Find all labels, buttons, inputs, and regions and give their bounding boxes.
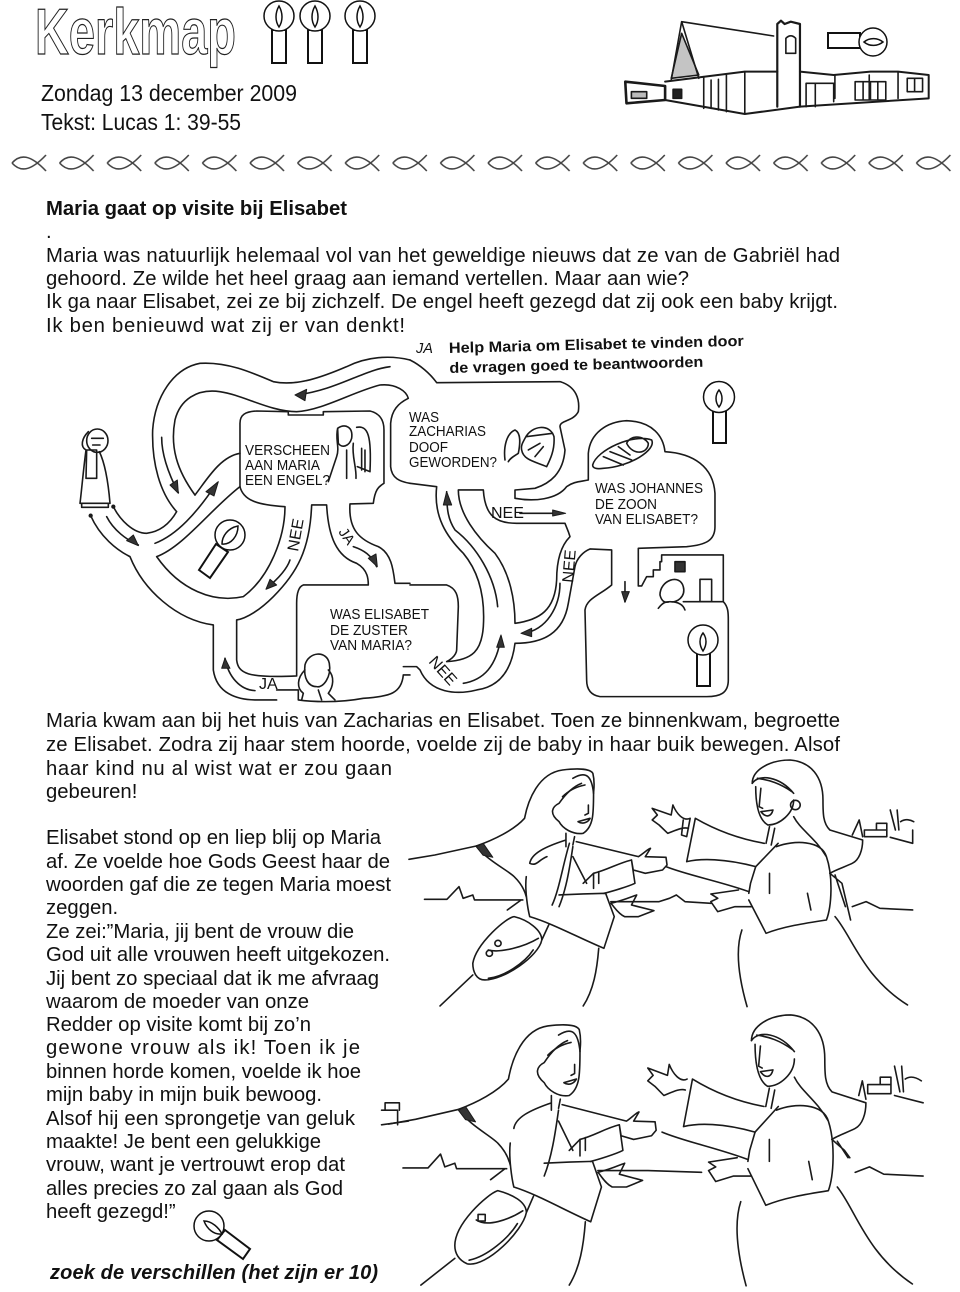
maze walls: left half xyxy=(89,357,410,702)
arrow: nee from Johannes xyxy=(521,583,560,637)
maze arrows xyxy=(107,367,629,691)
story text: Elisabet speaks: waarom de moeder van onze xyxy=(45,991,309,1013)
maze path labels: JA xyxy=(415,341,433,357)
story text: Elisabet speaks: Elisabet stond op en liep blij op Maria xyxy=(46,827,382,849)
story text: arrival: gebeuren! xyxy=(46,781,137,803)
caption: find the differences: zoek de verschillen (het zijn er 10) xyxy=(49,1262,378,1284)
icon: horizontal candle xyxy=(828,28,887,56)
maze question: Elisabet: VAN MARIA? xyxy=(330,638,412,654)
icon: candle top right xyxy=(704,382,734,443)
story text: Elisabet speaks: Alsof hij een sprongetje van geluk xyxy=(46,1108,356,1130)
arrow: up to Zacharias xyxy=(443,492,498,607)
maze path labels: NEE xyxy=(560,549,580,583)
story text: Elisabet speaks: zeggen. xyxy=(46,897,118,919)
maze question: Zacharias: DOOF xyxy=(409,440,448,456)
maze: figure of Maria xyxy=(80,429,110,507)
icon: candle tilted xyxy=(199,520,245,578)
Maria top xyxy=(409,769,711,1006)
icon: church building xyxy=(625,21,929,114)
story text: Elisabet speaks: woorden gaf die ze tegen Maria moest xyxy=(45,874,391,896)
story text: Elisabet speaks: vrouw, want je vertrouwt erop dat xyxy=(46,1154,345,1176)
intro text block: gehoord. Ze wilde het heel graag aan iemand vertellen. Maar aan wie? xyxy=(46,268,689,290)
arrow: ja lane xyxy=(353,547,377,567)
maze path labels: NEE xyxy=(491,505,524,522)
story text: Elisabet speaks: heeft gezegd!” xyxy=(46,1201,176,1223)
icon: candle 2 xyxy=(300,1,330,63)
maze path labels: JA xyxy=(259,676,278,693)
arrow: start lane xyxy=(107,517,138,546)
arrow: first descent xyxy=(162,437,178,493)
story text: arrival: haar kind nu al wist wat er zou gaan xyxy=(46,758,392,780)
intro text block: Maria was natuurlijk helemaal vol van het geweldige nieuws dat ze van de Gabriël had xyxy=(46,245,840,267)
scripture: Tekst: Lucas 1: 39-55 xyxy=(41,109,241,135)
intro text block: . xyxy=(46,221,52,243)
story text: Elisabet speaks: alles precies zo zal gaan als God xyxy=(46,1178,343,1200)
maze path labels: NEE xyxy=(285,517,308,553)
date and scripture reference xyxy=(41,80,297,135)
icon: three candles xyxy=(264,1,375,63)
maze puzzle xyxy=(80,333,745,702)
maze instruction: Help Maria om Elisabet te vinden door xyxy=(449,333,744,357)
maze: baby in swaddle xyxy=(593,437,652,469)
maze path labels: JA xyxy=(335,525,358,548)
story text: Elisabet speaks: mijn baby in mijn buik bewoog. xyxy=(46,1084,322,1106)
maze question: angel: AAN MARIA xyxy=(245,458,320,474)
story text: Elisabet speaks: Redder op visite komt bij zo’n xyxy=(46,1014,311,1036)
maze path labels: NEE xyxy=(425,653,460,689)
maze question: angel: EEN ENGEL? xyxy=(245,473,330,489)
story heading: Maria gaat op visite bij Elisabet xyxy=(46,198,347,220)
maze question: angel xyxy=(245,443,330,489)
story text: Elisabet speaks: Jij bent zo speciaal dat ik me afvraag xyxy=(46,968,379,990)
maze instruction xyxy=(449,333,745,377)
maze question: Elisabet: DE ZUSTER xyxy=(330,623,408,639)
maze: Elisabet portrait xyxy=(299,654,335,700)
maze question: Zacharias xyxy=(409,410,497,471)
arrow: nee to Johannes xyxy=(520,510,566,516)
story text: Elisabet speaks: binnen horde komen, voelde ik hoe xyxy=(46,1061,361,1083)
story text: arrival: Maria kwam aan bij het huis van Zacharias en Elisabet. Toen ze binnenkwam, begroette xyxy=(46,710,840,732)
maze question: Johannes: WAS JOHANNES xyxy=(595,481,703,497)
arrow: top lane xyxy=(295,367,390,401)
intro text block: Ik ben benieuwd wat zij er van denkt! xyxy=(46,315,405,337)
icon: candle 1 xyxy=(264,1,294,63)
maze question: Elisabet xyxy=(330,607,429,654)
story text: arrival xyxy=(46,710,840,803)
maze question: Zacharias: ZACHARIAS xyxy=(409,424,486,440)
Maria bottom xyxy=(382,1025,702,1285)
fish border divider xyxy=(0,150,960,176)
intro text block xyxy=(46,221,840,337)
story text: Elisabet speaks xyxy=(45,827,391,1223)
maze instruction: de vragen goed te beantwoorden xyxy=(449,354,704,377)
illustration: bottom picture, find the differences xyxy=(382,1015,923,1286)
maze: Zacharias xyxy=(505,427,554,467)
arrow: to house xyxy=(622,582,629,602)
Elisabet top xyxy=(652,760,914,1007)
maze question: Johannes: DE ZOON xyxy=(595,497,657,513)
maze question: Elisabet: WAS ELISABET xyxy=(330,607,429,623)
icon: candle near text end xyxy=(194,1211,250,1259)
arrow: nee lane left xyxy=(266,560,290,589)
icon: candle bottom right xyxy=(688,625,718,686)
maze question: Johannes xyxy=(595,481,703,528)
intro text block: Ik ga naar Elisabet, zei ze bij zichzelf. De engel heeft gezegd dat zij ook een baby krijgt. xyxy=(46,291,838,313)
date: Zondag 13 december 2009 xyxy=(41,80,297,106)
story text: Elisabet speaks: God uit alle vrouwen heeft uitgekozen. xyxy=(46,944,390,966)
story text: Elisabet speaks: af. Ze voelde hoe Gods Geest haar de xyxy=(46,851,390,873)
arrow: to angel xyxy=(155,482,218,543)
maze: angel xyxy=(328,426,370,482)
Elisabet bottom xyxy=(648,1015,923,1286)
arrow: from nee bottom xyxy=(463,635,504,683)
story text: Elisabet speaks: gewone vrouw als ik! Toen ik je xyxy=(46,1037,360,1059)
maze walls: right half xyxy=(403,360,728,697)
maze path labels xyxy=(259,341,580,693)
story text: arrival: ze Elisabet. Zodra zij haar stem hoorde, voelde zij de baby in haar buik bewegen. Alsof xyxy=(46,734,840,756)
maze: woman at house xyxy=(658,562,712,610)
maze question: angel: VERSCHEEN xyxy=(245,443,330,459)
maze question: Johannes: VAN ELISABET? xyxy=(595,512,698,528)
icon: candle 3 xyxy=(345,1,375,63)
story text: Elisabet speaks: maakte! Je bent een gelukkige xyxy=(46,1131,321,1153)
maze question: Zacharias: WAS xyxy=(409,410,439,426)
maze question: Zacharias: GEWORDEN? xyxy=(409,455,497,471)
illustration: top picture of Maria and Elisabet xyxy=(409,760,914,1007)
story text: Elisabet speaks: Ze zei:”Maria, jij bent de vrouw die xyxy=(46,921,354,943)
arrow: ja bottom xyxy=(222,658,255,691)
